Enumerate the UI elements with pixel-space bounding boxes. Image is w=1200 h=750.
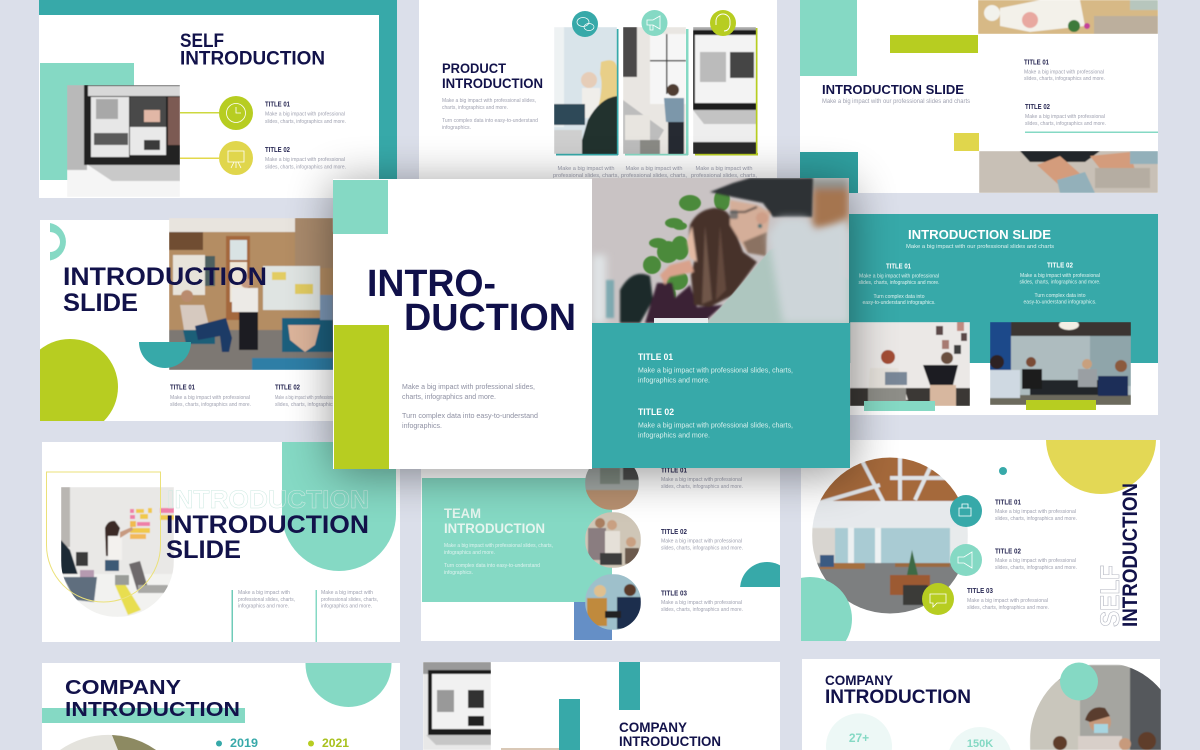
- heading: TEAM: [444, 506, 481, 521]
- captions: professional slides, charts,: [553, 173, 619, 179]
- photo: two women at laptop: [554, 27, 617, 154]
- photo circle: [60, 735, 156, 750]
- man glasses: [730, 207, 757, 212]
- text block: columns: professional slides, charts,: [321, 597, 378, 603]
- text block: titles: Make a big impact with professional: [661, 477, 742, 483]
- text block: left: Make a big impact with professional slides,: [402, 382, 535, 391]
- text block: titles: slides, charts, infographics and more.: [967, 605, 1049, 611]
- shadow of main slide: [333, 184, 851, 474]
- panel: product introduction slide: [419, 0, 777, 179]
- text block: titles: Make a big impact with professional: [275, 395, 335, 401]
- mint half circle: [306, 663, 392, 707]
- photo: laptop screen: [693, 27, 756, 154]
- text block: titles: [1024, 60, 1106, 127]
- text block: titles: TITLE 03: [661, 590, 687, 598]
- icon: mint megaphone: [950, 544, 982, 576]
- text block: titles: slides, charts, infographics and more.: [995, 565, 1077, 571]
- icon: chat bubbles: [572, 11, 598, 37]
- text block: Turn complex data into easy-to-understand: [444, 563, 540, 569]
- stat: 27+: [826, 713, 892, 750]
- mint arch shape: [282, 442, 396, 571]
- text block: titles: Make a big impact with professional: [170, 395, 250, 401]
- panel: team introduction slide: [421, 456, 794, 641]
- photo: team at whiteboard: [169, 218, 334, 370]
- heading: INTRODUCTION: [166, 511, 369, 539]
- heading: INTRODUCTION SLIDE: [908, 227, 1051, 242]
- text block: title 02: [638, 407, 793, 440]
- text block: titles: [858, 262, 1101, 306]
- captions: Make a big impact with: [626, 166, 682, 172]
- vertical heading: INTRODUCTION: [1119, 483, 1142, 627]
- text block: titles: TITLE 01: [265, 102, 290, 108]
- captions: professional slides, charts,: [691, 173, 757, 179]
- heading: INTRODUCTION: [442, 76, 543, 91]
- text block: titles: easy-to-understand infographics.: [1024, 300, 1097, 306]
- panel: company introduction slide right: [802, 659, 1161, 750]
- mint circle: [1060, 662, 1098, 700]
- blue square: [574, 602, 612, 640]
- heading: INTRODUCTION SLIDE: [822, 82, 964, 97]
- text block: titles: TITLE 02: [265, 147, 290, 154]
- text block: Turn complex data into easy-to-understand: [442, 118, 538, 124]
- text block: title 02: TITLE 02: [638, 407, 674, 418]
- photo: women with laptop: [850, 322, 970, 406]
- heading: INTRODUCTION: [180, 48, 325, 70]
- text block: titles: Make a big impact with professional: [265, 112, 345, 118]
- text block: title 01: infographics and more.: [638, 376, 710, 384]
- mint square: [333, 180, 388, 234]
- text block: titles: Turn complex data into: [874, 294, 924, 300]
- text block: titles: Make a big impact with professional: [661, 538, 742, 544]
- text block: title 01: TITLE 01: [638, 352, 674, 363]
- photo: hands on keyboard: [979, 151, 1158, 193]
- text block: left: Turn complex data into easy-to-understand: [402, 411, 538, 420]
- text block: titles: slides, charts, infographics and more.: [858, 280, 940, 286]
- photo: laptop: [423, 662, 491, 750]
- panel: main introduction slide: [333, 178, 850, 469]
- photo: desk with notebook: [978, 0, 1158, 34]
- text block: titles: TITLE 01: [661, 468, 687, 474]
- text block: infographics.: [444, 570, 473, 576]
- heading: [619, 720, 721, 749]
- text block: titles: slides, charts, infographics and more.: [661, 607, 743, 613]
- heading: COMPANY: [619, 720, 687, 735]
- icon: lime chat: [922, 583, 954, 615]
- icon: mint half ring: [50, 223, 66, 260]
- teal panel: [592, 323, 850, 468]
- text block: titles: slides, charts, infographics and more.: [995, 516, 1077, 522]
- text block: title 02: Make a big impact with professional slides, charts,: [638, 420, 793, 430]
- text block: titles: slides, charts, infographics and more.: [170, 402, 251, 408]
- heading: intro-duction: [367, 263, 576, 339]
- text block: titles: [967, 500, 1077, 611]
- text block: titles: Make a big impact with professional: [995, 558, 1076, 564]
- text block: title 01: [638, 352, 793, 384]
- text block: titles: slides, charts, infographics and more.: [265, 119, 346, 125]
- text block: titles: TITLE 02: [995, 548, 1021, 556]
- icon: headset: [710, 10, 736, 36]
- subheading: Make a big impact with our professional slides and charts: [822, 98, 971, 105]
- text block: titles: Make a big impact with professional: [1020, 273, 1100, 279]
- heading: COMPANY: [65, 677, 182, 699]
- heading: [825, 673, 971, 708]
- stat: 27+: 27+: [849, 731, 869, 745]
- timeline 2021: 2021: [322, 736, 349, 750]
- text block: titles: slides, charts, infographics and more.: [265, 164, 346, 170]
- mint strip: [42, 708, 245, 723]
- man cap: [710, 178, 813, 217]
- teal dot: [999, 467, 1007, 475]
- text block: infographics.: [442, 125, 471, 131]
- stat: 150K: [949, 727, 1011, 750]
- heading: PRODUCT: [442, 61, 507, 76]
- heading: INTRODUCTION: [63, 263, 267, 291]
- text block: titles: TITLE 02: [1025, 104, 1050, 111]
- text block: titles: Make a big impact with professional: [1024, 70, 1104, 76]
- woman face: [687, 226, 697, 262]
- icon: clock: [219, 96, 253, 130]
- text block: title 02: infographics and more.: [638, 430, 710, 440]
- photo: woman in office: [623, 27, 686, 154]
- blurred foreground: [768, 218, 849, 323]
- text block: [444, 543, 553, 576]
- panel: introduction slide left: [40, 218, 333, 421]
- vertical outlined word: SELF: [1095, 565, 1125, 627]
- bag: [620, 274, 653, 323]
- text block: columns: Make a big impact with: [321, 590, 373, 596]
- teal half circle: [139, 342, 191, 368]
- text block: titles: [170, 384, 335, 408]
- panel: company introduction slide middle: [423, 662, 780, 750]
- text block: titles: slides, charts, infographics and more.: [661, 546, 743, 552]
- text block: titles: [661, 468, 743, 613]
- lime bar: [334, 325, 389, 469]
- lime circle: [40, 339, 118, 421]
- yellow outline shield: [46, 472, 160, 602]
- panel: self introduction slide: [39, 0, 397, 198]
- photo circle 1: [585, 468, 639, 510]
- timeline 2021: [308, 736, 349, 750]
- timeline 2019: [216, 736, 258, 750]
- text block: columns: infographics and more.: [238, 604, 289, 610]
- text block: titles: TITLE 01: [1024, 60, 1049, 66]
- heading: SLIDE: [63, 289, 138, 317]
- text block: titles: TITLE 02: [1047, 262, 1073, 270]
- text block: titles: TITLE 02: [661, 529, 687, 536]
- panel: company introduction slide left: [42, 663, 400, 750]
- text block: titles: Make a big impact with professional: [995, 509, 1076, 515]
- text block: titles: TITLE 01: [170, 384, 195, 392]
- teal half circle: [740, 562, 780, 587]
- text block: titles: Make a big impact with professional: [1025, 114, 1105, 120]
- lime strip: [1026, 400, 1096, 410]
- text block: titles: Make a big impact with professional: [265, 157, 345, 163]
- heading: INTRODUCTION: [444, 521, 545, 536]
- heading: [180, 31, 325, 70]
- woman sweater: [645, 283, 723, 323]
- teal bar top: [619, 662, 640, 710]
- heading: [444, 506, 545, 536]
- text block: columns: Make a big impact with: [238, 590, 290, 596]
- mint strip: [864, 401, 935, 411]
- ghost outlined heading: INTRODUCTION: [167, 486, 369, 514]
- heading: SLIDE: [166, 536, 241, 564]
- text block: titles: TITLE 01: [995, 500, 1021, 506]
- text block: columns: [238, 590, 378, 610]
- text block: titles: slides, charts, infographics and more.: [1024, 76, 1105, 82]
- photo: man and woman: [592, 178, 849, 324]
- panel: introduction slide top right: [800, 0, 1158, 193]
- beige strip: [501, 748, 559, 750]
- text block: left: charts, infographics and more.: [402, 392, 496, 401]
- heading: SELF: [180, 31, 224, 52]
- text block: titles: TITLE 01: [886, 264, 911, 270]
- heading: [442, 61, 543, 91]
- text block: title 01: Make a big impact with professional slides, charts,: [638, 366, 793, 374]
- stat: 150K: 150K: [967, 738, 993, 750]
- heading: [63, 263, 267, 317]
- photo: arch with people: [1030, 665, 1161, 750]
- panel: introduction slide with arch photo: [42, 442, 400, 642]
- panel: introduction slide right teal: [840, 214, 1158, 415]
- text block: left: infographics.: [402, 421, 442, 430]
- photo: open office: [812, 457, 968, 615]
- photo: meeting room: [990, 320, 1131, 405]
- text block: columns: infographics and more.: [321, 604, 372, 610]
- heading: intro-duction: DUCTION: [404, 297, 576, 339]
- heading: [166, 511, 369, 564]
- yellow circle: [1046, 440, 1156, 494]
- plant leaves: [643, 189, 730, 304]
- photo: woman with sticky notes: [61, 487, 174, 617]
- captions: [553, 166, 757, 179]
- subheading: Make a big impact with our professional slides and charts: [906, 244, 1054, 250]
- heading: INTRODUCTION: [65, 699, 240, 721]
- text block: titles: [265, 102, 346, 170]
- heading: INTRODUCTION: [825, 686, 971, 708]
- heading: INTRODUCTION: [619, 734, 721, 749]
- man face: [730, 200, 770, 255]
- white strip: [654, 318, 708, 323]
- photo circle 3: [585, 574, 641, 630]
- captions: Make a big impact with: [558, 166, 614, 172]
- text block: titles: slides, charts, infographics and more.: [661, 484, 743, 490]
- text block: left: [402, 382, 538, 430]
- text block: titles: TITLE 02: [275, 384, 300, 392]
- text block: titles: easy-to-understand infographics.: [862, 300, 936, 306]
- text block: charts, infographics and more.: [442, 105, 508, 111]
- woman hair: [688, 208, 757, 307]
- photo circle 2: [585, 512, 641, 568]
- text block: titles: Make a big impact with professional: [859, 274, 939, 280]
- icon: teal hand: [950, 495, 982, 527]
- text block: titles: slides, charts, infographics and more.: [1020, 280, 1101, 286]
- panel: self introduction vertical slide: [801, 440, 1160, 641]
- heading: [65, 677, 240, 721]
- text block: titles: slides, charts, infographics: [275, 402, 335, 408]
- text block: columns: professional slides, charts,: [238, 597, 295, 603]
- text block: titles: Make a big impact with professional: [661, 600, 742, 606]
- captions: Make a big impact with: [696, 166, 752, 172]
- icon: presentation board: [219, 141, 253, 175]
- heading: intro-duction: INTRO-: [367, 263, 496, 305]
- text block: titles: Turn complex data into: [1034, 293, 1086, 299]
- text block: infographics and more.: [444, 550, 495, 556]
- captions: professional slides, charts,: [621, 173, 687, 179]
- text block: titles: Make a big impact with professional: [967, 598, 1048, 604]
- heading: COMPANY: [825, 673, 893, 688]
- text block: titles: TITLE 03: [967, 588, 993, 595]
- icon: megaphone: [642, 10, 668, 36]
- text block: [442, 98, 538, 131]
- photo: laptop: [67, 85, 180, 197]
- text block: Make a big impact with professional slides, charts,: [444, 543, 553, 549]
- timeline 2019: 2019: [230, 736, 258, 750]
- teal bar lower: [559, 699, 580, 750]
- text block: titles: slides, charts, infographics and more.: [1025, 121, 1106, 127]
- text block: Make a big impact with professional slides,: [442, 98, 536, 104]
- mint corner circle: [801, 577, 852, 641]
- man sweater: [707, 242, 849, 323]
